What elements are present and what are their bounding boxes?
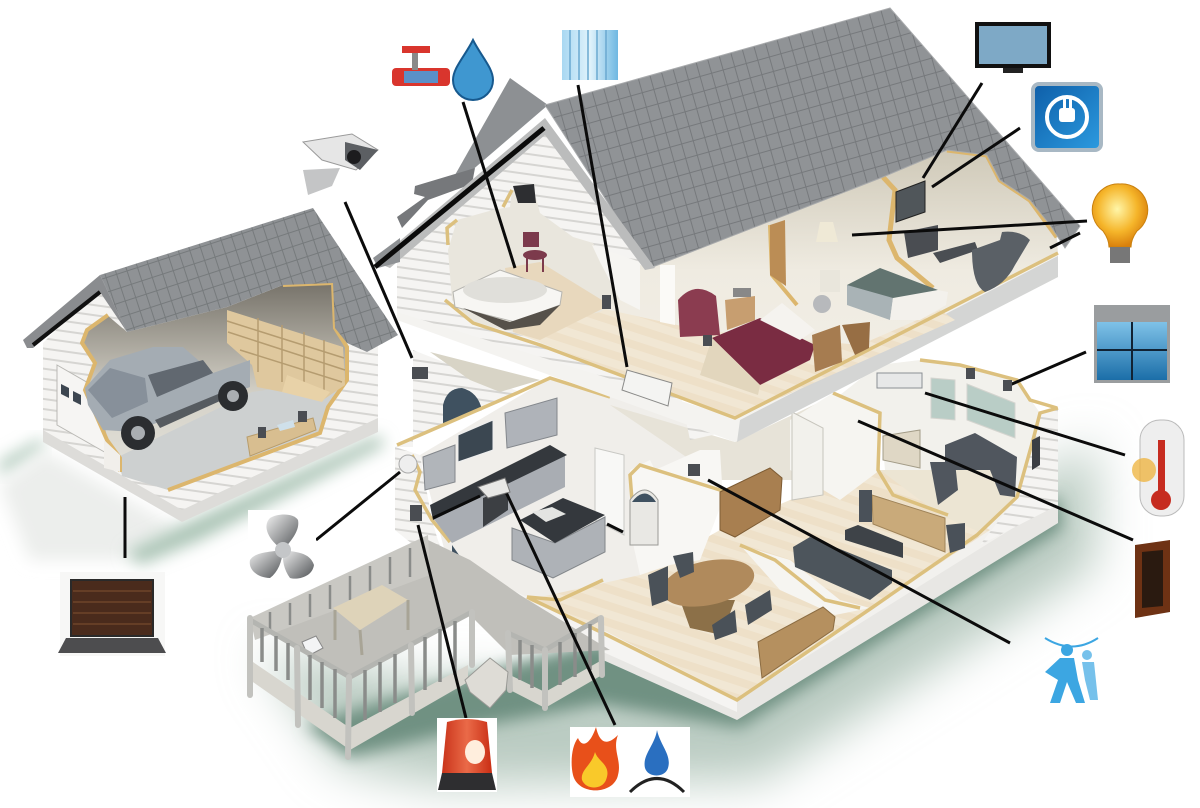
- file cabinet: [883, 430, 920, 468]
- dining and living floor: [527, 470, 990, 698]
- bedroom cut edge: [883, 177, 933, 288]
- garage interior: [82, 283, 347, 487]
- deck skirt: [250, 660, 468, 750]
- outer right wall: [980, 407, 1058, 545]
- kitchen upper cabinets left: [423, 445, 455, 490]
- gold upper edges: [445, 190, 1058, 418]
- garage door windows: [61, 384, 81, 405]
- office desk: [945, 433, 1017, 497]
- garage corner post: [104, 440, 120, 472]
- grey armchair: [972, 232, 1030, 292]
- ground shadow: [0, 435, 1095, 785]
- wardrobe edge: [770, 220, 786, 286]
- garage base: [43, 418, 378, 522]
- partition edge: [770, 225, 797, 305]
- garage link rake: [373, 238, 400, 268]
- sideboard cabinet: [872, 495, 945, 552]
- dormer roof: [397, 168, 475, 228]
- dining chairs: [648, 552, 772, 640]
- upper interior right wall: [540, 150, 1058, 418]
- single bed: [847, 268, 948, 320]
- bath interior: [448, 187, 625, 332]
- icon: fire: [570, 727, 690, 797]
- icon: light bulb: [1092, 184, 1148, 263]
- icon: water drop: [453, 40, 493, 100]
- door panels: [792, 412, 823, 500]
- fan controller: [399, 455, 417, 473]
- white interior partition: [630, 450, 723, 575]
- gable siding wall: [397, 125, 735, 440]
- workbench with devices: [247, 411, 316, 456]
- deck back rail: [250, 535, 430, 640]
- sofa: [793, 537, 892, 600]
- gable rake: [375, 118, 655, 270]
- lower storey front slab: [395, 447, 737, 712]
- garage floor: [118, 378, 345, 490]
- rear roof: [455, 78, 548, 175]
- kitchen side wall siding: [395, 350, 520, 447]
- office windows: [931, 378, 1015, 438]
- stairs: [465, 658, 508, 708]
- floor lamp: [813, 222, 840, 313]
- icon: thermometer: [1132, 420, 1184, 516]
- garage walls: [43, 285, 378, 520]
- garage gable rake: [23, 275, 127, 348]
- bathtub: [453, 270, 562, 330]
- connector lines: [125, 83, 1133, 725]
- kitchen window: [458, 420, 493, 462]
- bedside unit: [812, 325, 842, 372]
- garage door: [57, 365, 115, 458]
- laptop: [302, 636, 323, 656]
- office floor: [880, 465, 1025, 532]
- kitchen wall and floor: [420, 378, 720, 600]
- storage shelves: [227, 310, 345, 402]
- garage roof: [100, 208, 398, 352]
- island: [512, 498, 605, 578]
- dark doorway cabinet: [452, 545, 473, 582]
- bedroom white pillar: [660, 265, 675, 325]
- slab: [397, 253, 1058, 442]
- stove burners: [478, 478, 510, 498]
- kitchen base cabinets: [433, 455, 565, 543]
- fridge: [595, 448, 624, 535]
- balusters: [262, 621, 590, 720]
- garage cutaway edge right: [168, 283, 347, 490]
- icon: garage door: [58, 572, 166, 656]
- SUV: [85, 347, 250, 450]
- table frame: [335, 600, 408, 655]
- upper floor boards: [513, 308, 955, 418]
- main roof: [545, 8, 1080, 268]
- deck table: [333, 585, 408, 630]
- ceiling device: [513, 184, 536, 203]
- office wall: [840, 360, 1040, 497]
- icon: CCTV camera: [303, 134, 378, 195]
- interior partition by dining: [740, 545, 870, 615]
- coffee table: [845, 525, 903, 558]
- icon: door: [1135, 540, 1170, 618]
- small sensors: [410, 295, 1012, 521]
- dining table: [657, 552, 759, 635]
- small table: [933, 242, 978, 263]
- left wall siding: [395, 447, 447, 572]
- bathroom chair: [523, 232, 547, 272]
- oven: [483, 488, 508, 527]
- icon: television: [975, 22, 1051, 73]
- arched drawers: [630, 490, 658, 545]
- kitchen counter: [430, 445, 567, 520]
- bedroom cut edge right: [947, 150, 1057, 237]
- wall switch panel: [622, 370, 672, 406]
- bedroom device: [733, 288, 751, 297]
- speakers: [859, 490, 965, 553]
- deck skirt right: [510, 660, 602, 708]
- double bed: [700, 303, 815, 395]
- air conditioner: [877, 373, 922, 388]
- icon: gas flame: [630, 730, 684, 792]
- arched window: [443, 388, 482, 425]
- wall tv: [896, 181, 925, 222]
- attic shadow wall: [430, 352, 540, 392]
- icon: window with shutter: [1094, 305, 1170, 383]
- lower storey base band: [603, 495, 1058, 720]
- media stand: [904, 225, 938, 258]
- icon: red alarm beacon: [437, 718, 497, 792]
- kitchen upper cabinets right: [505, 398, 557, 448]
- icon: fan: [248, 510, 316, 582]
- icon: motion sensor people: [1045, 638, 1098, 703]
- icon: power plug: [1033, 84, 1101, 150]
- garage: [23, 208, 398, 522]
- office tv: [1032, 436, 1040, 470]
- low sideboard: [758, 607, 835, 678]
- icon: radiator: [562, 30, 618, 80]
- icon: water valve: [392, 46, 450, 86]
- deck posts: [250, 612, 602, 757]
- armchair: [678, 289, 720, 337]
- garage black edge: [33, 292, 100, 345]
- white pillars: [592, 245, 640, 310]
- bath floor: [505, 262, 610, 340]
- gold cut edges lower: [397, 360, 1058, 700]
- lower storey: [395, 350, 1058, 720]
- nightstand: [725, 296, 755, 330]
- rear interior back wall: [610, 395, 885, 480]
- office chair: [930, 462, 958, 505]
- right corner wall fill: [737, 407, 1058, 700]
- upper storey: [373, 8, 1080, 442]
- deck front rails: [250, 612, 600, 677]
- white room wall: [790, 393, 880, 500]
- gable black edge: [375, 128, 544, 267]
- bookcase: [720, 468, 782, 537]
- deck: [250, 535, 610, 757]
- garage cutaway edge: [82, 315, 120, 472]
- deck floor: [255, 540, 610, 680]
